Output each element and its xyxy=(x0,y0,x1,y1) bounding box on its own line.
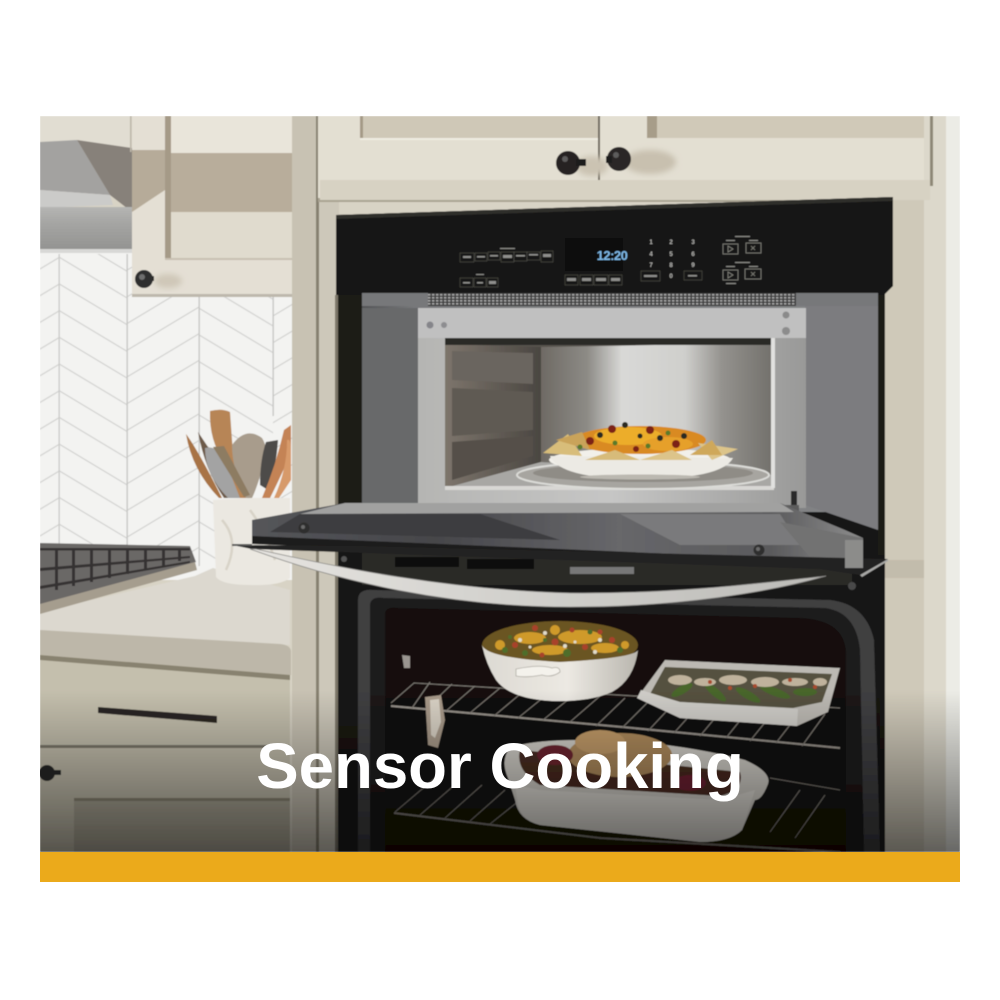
oven light reflection xyxy=(402,655,445,748)
bowl with food xyxy=(482,621,638,701)
backsplash: white chevron tile xyxy=(40,250,292,580)
lower cabinets xyxy=(39,655,290,852)
bottom dark gradient xyxy=(40,690,960,852)
control labels xyxy=(726,236,758,284)
lower oven gasket and cavity xyxy=(338,570,885,852)
number keypad: 6 xyxy=(691,252,695,258)
casserole dish with roast xyxy=(504,730,769,842)
upper rack xyxy=(391,682,840,748)
left panel button marks xyxy=(463,248,697,284)
panel display: 12:20 xyxy=(565,238,628,271)
oven body xyxy=(338,290,885,852)
pillar between cabinet and oven xyxy=(292,116,339,852)
number keypad: 3 xyxy=(691,240,695,246)
left panel buttons xyxy=(460,251,702,287)
number keypad: 1 xyxy=(649,240,653,246)
number keypad: 0 xyxy=(669,274,673,280)
icon: lower knob xyxy=(39,765,61,781)
wooden and steel utensils xyxy=(186,410,291,498)
microwave turntable xyxy=(517,461,769,489)
nachos on white plate xyxy=(543,422,738,480)
number keypad: 4 xyxy=(649,252,653,258)
icon: left door knob xyxy=(556,151,586,175)
upper cabinet doors with knobs xyxy=(318,116,930,202)
utensil holder xyxy=(213,498,290,585)
open microwave door xyxy=(232,503,888,577)
icon: cabinet knob xyxy=(135,270,154,288)
number keypad: 2 xyxy=(669,240,673,246)
panel display: 12:20: 12:20 xyxy=(597,248,628,263)
door handle xyxy=(250,549,826,607)
icon: right door knob xyxy=(606,147,631,171)
baking tray with vegetables xyxy=(637,660,840,726)
microwave cavity xyxy=(445,338,775,490)
microwave front plate xyxy=(418,308,806,508)
vent strip xyxy=(362,293,878,309)
range hood xyxy=(40,116,133,253)
oven control panel xyxy=(336,197,893,295)
latch xyxy=(785,490,800,511)
backplate vents xyxy=(341,553,856,590)
number keypad: 8 xyxy=(669,263,673,269)
upper left cabinet with knob xyxy=(130,116,292,297)
photo: kitchen with open wall oven xyxy=(39,116,960,852)
number keypad xyxy=(649,240,695,280)
icon: drawer handle xyxy=(98,707,217,723)
start and cancel buttons xyxy=(723,243,761,280)
gas cooktop grates xyxy=(40,543,197,614)
microwave steel surround xyxy=(361,306,879,531)
right side cabinet frame xyxy=(320,116,960,852)
countertop xyxy=(40,568,291,675)
title: Sensor Cooking xyxy=(256,731,744,802)
number keypad: 9 xyxy=(691,263,695,269)
under door dark interior xyxy=(338,555,885,615)
number keypad: 7 xyxy=(649,263,653,269)
lower rack xyxy=(394,778,840,852)
yellow footer bar xyxy=(40,852,960,882)
number keypad: 5 xyxy=(669,252,673,258)
